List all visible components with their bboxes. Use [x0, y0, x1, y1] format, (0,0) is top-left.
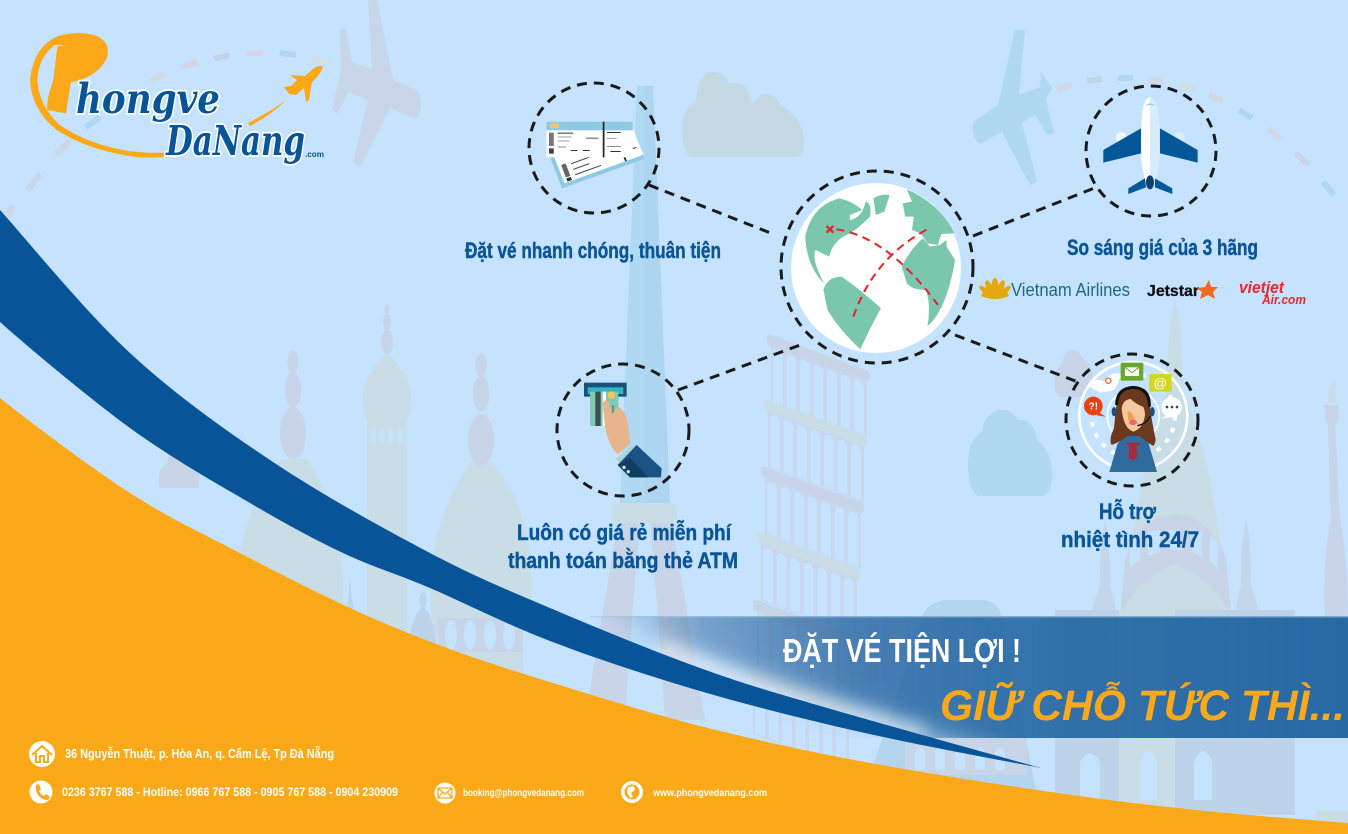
background: clouds [682, 72, 1093, 496]
connector lines [649, 185, 1097, 390]
background: left faded plane [332, 0, 421, 166]
background: Eiffel tower [585, 86, 705, 720]
icon: phone [30, 780, 52, 804]
feature: tickets [529, 83, 659, 213]
heading: low price: thanh toán bằng thẻ ATM [508, 548, 738, 573]
heading: low price [508, 520, 738, 573]
heading: support: Hỗ trợ [1099, 499, 1156, 524]
contact: address [29, 741, 334, 767]
logo word DaNang: DaNang [165, 117, 305, 165]
background: right skyline [1055, 300, 1348, 834]
slogan line one: ĐẶT VÉ TIỆN LỢI ! [783, 632, 1021, 669]
feature: airlines [1086, 86, 1216, 216]
heading: fast booking: Đặt vé nhanh chóng, thuân tiện [465, 238, 721, 263]
icon: mail [434, 782, 456, 804]
heading: low price: Luôn có giá rẻ miễn phí [517, 520, 732, 545]
logo: Jetstar [1147, 280, 1218, 300]
ATM dashed ring [557, 364, 689, 496]
logo domain: .com [305, 150, 324, 159]
background: dashed flight arcs [6, 53, 1334, 218]
heading: support [1061, 499, 1199, 552]
icon: globe [621, 781, 643, 803]
banner: glow above swoosh [660, 648, 924, 735]
logo: Jetstar: Jetstar [1147, 283, 1199, 300]
ticket icon [547, 122, 645, 189]
background: domed building behind slogan [865, 600, 1036, 790]
globe continents and routes [805, 189, 955, 349]
logo: VietJet Air [1239, 278, 1306, 307]
background: right faded plane [972, 30, 1054, 185]
logo: VietJet Air: vietjet [1239, 278, 1285, 297]
globe hub [781, 171, 973, 363]
support agent icon: ?! [1089, 402, 1098, 413]
contact: phone [30, 780, 398, 804]
logo word hongve: hongve [76, 75, 220, 123]
icon: home [29, 741, 55, 767]
contact: email [434, 782, 584, 804]
contact: email: booking@phongvedanang.com [463, 788, 584, 799]
logo: Vietnam Airlines: Vietnam Airlines [1011, 280, 1130, 300]
support agent icon: @ [1154, 375, 1167, 390]
logo letter P and swirl [30, 33, 171, 158]
feature: support [1066, 354, 1198, 486]
orange wave [0, 398, 1348, 834]
feature: ATM card [557, 364, 689, 496]
globe dashed ring [781, 171, 973, 363]
logo flight trail [248, 100, 286, 126]
background: left mosque skyline [159, 304, 532, 690]
globe disc [791, 183, 961, 353]
logo [30, 33, 324, 165]
airplane dashed ring [1086, 86, 1216, 216]
logo plane [284, 66, 323, 102]
slogan line two: GIỮ CHỖ TỨC THÌ... [940, 681, 1345, 730]
heading: compare prices: So sáng giá của 3 hãng [1067, 235, 1258, 260]
ticket dashed ring [529, 83, 659, 213]
airplane icon [1103, 97, 1198, 194]
contact: address: 36 Nguyễn Thuật, p. Hòa An, q. Cẩm Lệ, Tp Đà Nẵng [65, 746, 334, 761]
background: leaning tower [749, 334, 870, 770]
support dashed ring [1066, 354, 1198, 486]
contact: phone: 0236 3767 588 - Hotline: 0966 767 588 - 0905 767 588 - 0904 230909 [62, 787, 398, 799]
ATM card and hand icon [584, 383, 662, 477]
contact: website: www.phongvedanang.com [652, 788, 767, 799]
blue swoosh [0, 210, 1041, 768]
logo: Vietnam Airlines [978, 278, 1130, 300]
logo: VietJet Air: Air.com [1261, 293, 1306, 307]
contact: website [621, 781, 767, 803]
support agent icon [1079, 362, 1187, 472]
banner: slogan background [590, 616, 1348, 738]
heading: support: nhiệt tình 24/7 [1061, 527, 1199, 552]
